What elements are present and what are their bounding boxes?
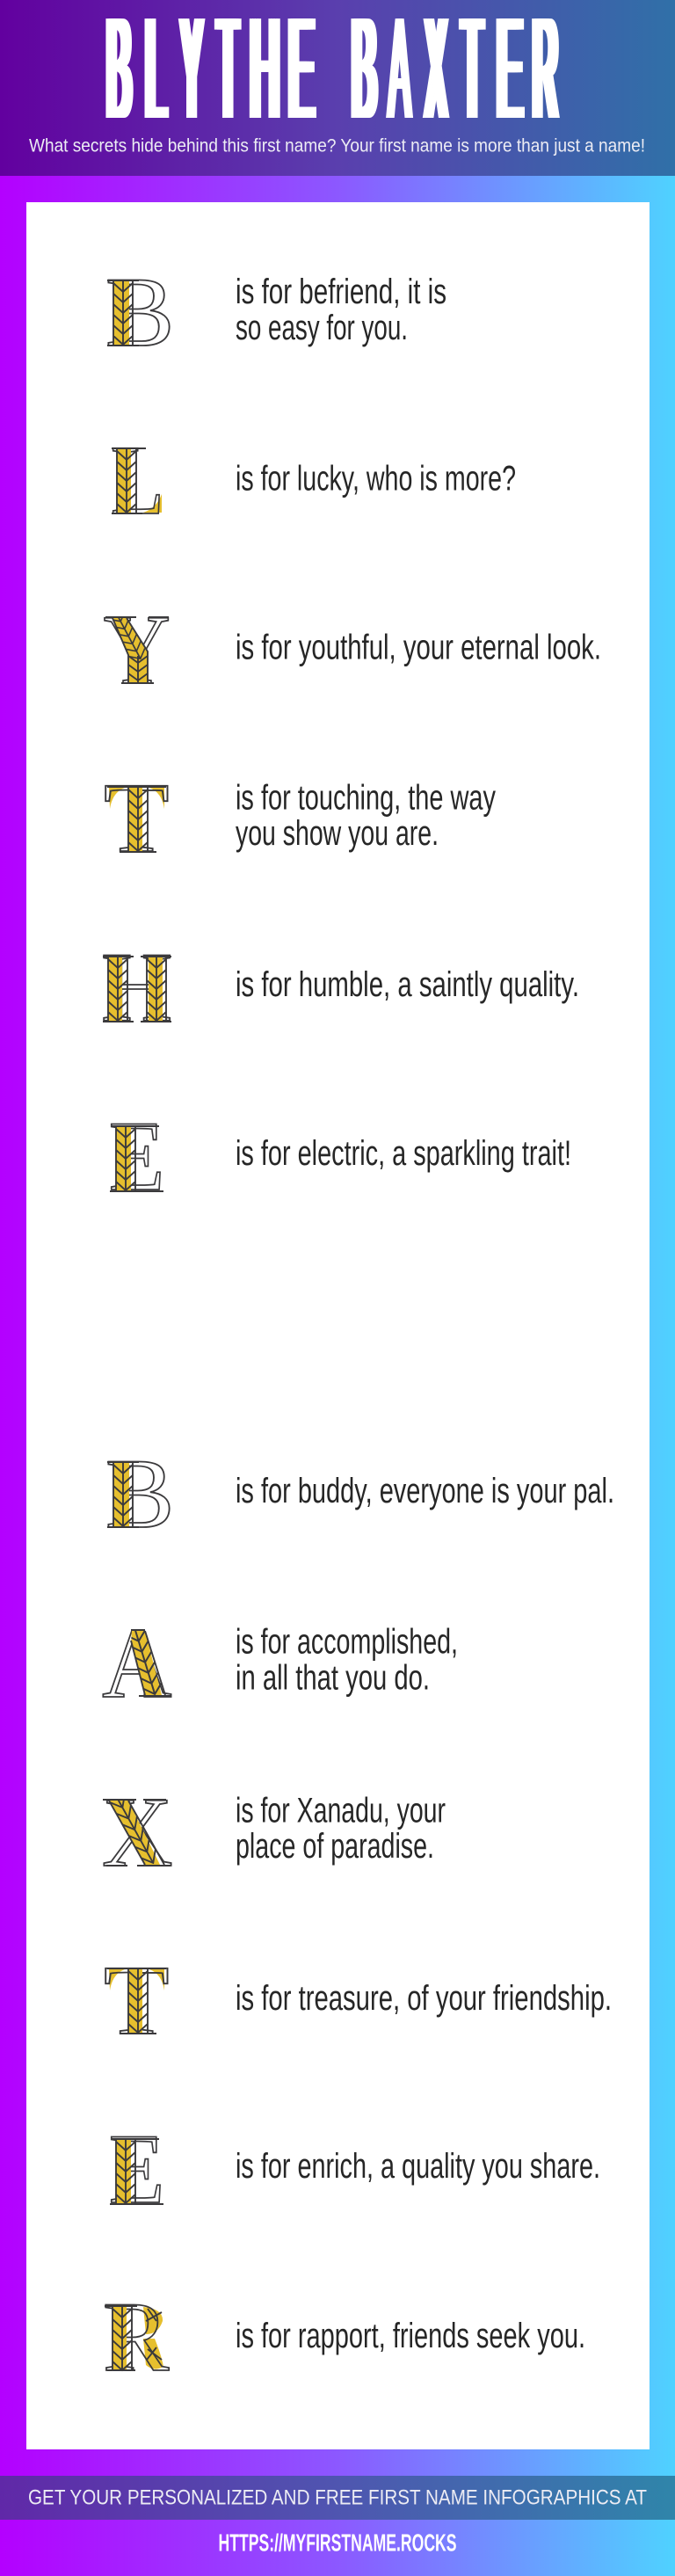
- row: E enrich: [109, 2114, 600, 2224]
- text: touching: you show you are.: [236, 814, 439, 853]
- text: Xanadu: is for Xanadu, your: [236, 1792, 446, 1830]
- icon: letter X: X: [102, 1779, 173, 1888]
- footer url: HTTPS://MYFIRSTNAME.ROCKS: [218, 2529, 457, 2557]
- icon: letter A: A: [102, 1610, 171, 1719]
- text: Xanadu: [236, 1792, 446, 1866]
- text: befriend: is for befriend, it is: [236, 273, 446, 311]
- icon: letter B: B: [105, 1438, 174, 1549]
- icon: letter T: T: [104, 763, 170, 873]
- row: L lucky: [111, 426, 516, 535]
- row: B buddy: [105, 1438, 614, 1549]
- row: E electric: [109, 1102, 571, 1212]
- icon: letter R: R: [103, 2282, 170, 2392]
- row: T treasure: [104, 1946, 612, 2056]
- text: accomplished: in all that you do.: [236, 1659, 430, 1698]
- text: touching: is for touching, the way: [236, 779, 496, 818]
- text: accomplished: [236, 1623, 458, 1698]
- text: touching: [236, 779, 496, 853]
- text: accomplished: is for accomplished,: [236, 1623, 458, 1662]
- text: lucky: is for lucky, who is more?: [236, 460, 516, 498]
- row: T touching: [104, 763, 496, 873]
- text: befriend: [236, 273, 446, 347]
- row: Y youthful: [104, 616, 599, 684]
- icon: letter A: [102, 1629, 172, 1698]
- row: X Xanadu: [103, 1797, 445, 1867]
- icon: letter Y: Y: [104, 595, 171, 705]
- icon: letter T: T: [104, 1946, 170, 2056]
- footer band: [0, 2476, 675, 2520]
- row: B befriend: [105, 257, 446, 367]
- title: [103, 0, 560, 149]
- row: A accomplished: [102, 1628, 455, 1698]
- icon: letter L: L: [111, 426, 164, 535]
- text: befriend: so easy for you.: [236, 309, 408, 347]
- icon: letter H: H: [101, 933, 173, 1043]
- header band: [0, 0, 675, 176]
- row: R rapport: [103, 2282, 585, 2392]
- row: H humble: [101, 933, 579, 1043]
- text: Xanadu: place of paradise.: [236, 1827, 434, 1866]
- icon: letter B: B: [105, 257, 174, 367]
- icon: letter Y: [104, 616, 169, 684]
- icon: letter X: [103, 1799, 172, 1867]
- icon: letter E: E: [109, 2114, 164, 2224]
- icon: letter E: E: [109, 1102, 164, 1212]
